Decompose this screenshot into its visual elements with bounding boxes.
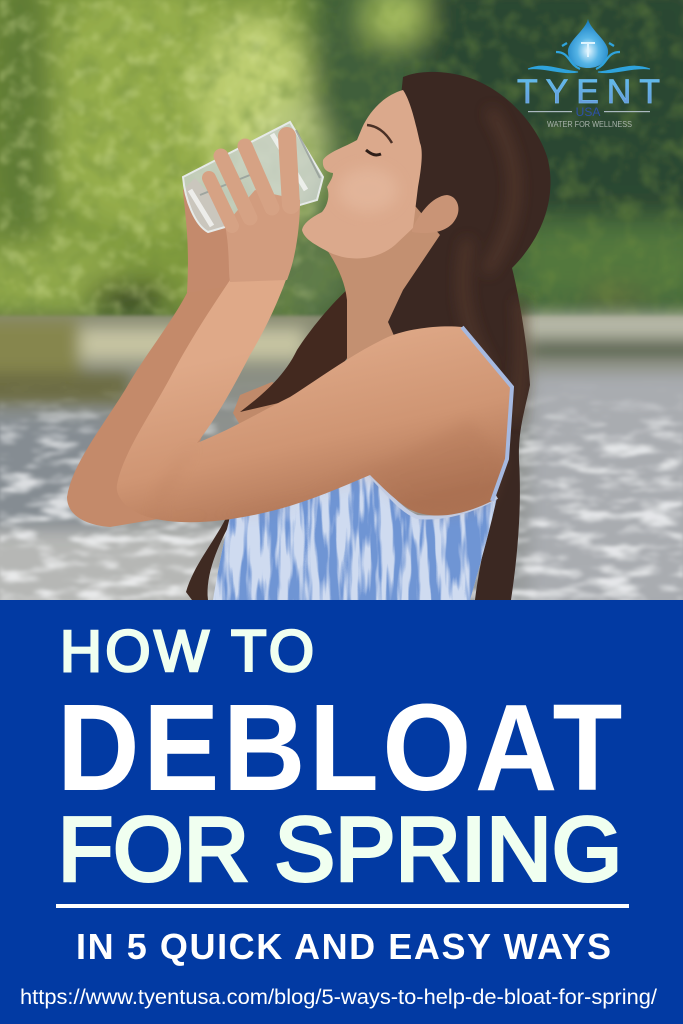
icon: water drop with waves [528, 19, 650, 73]
hair: left lock [240, 291, 347, 412]
subheading: IN 5 QUICK AND EASY WAYS [76, 926, 611, 967]
heading: FOR SPRING: FOR SPRING [58, 800, 622, 900]
hair: back mass [380, 72, 550, 600]
neck [328, 206, 440, 360]
logo: Tyent USA [517, 19, 660, 129]
hand holding glass [209, 136, 300, 282]
shoulder, upper arm and near forearm [117, 277, 512, 522]
hair: lower left strand [186, 518, 232, 600]
river [0, 314, 683, 620]
head and face [302, 90, 422, 258]
logo tagline: WATER FOR WELLNESS [547, 120, 632, 129]
dress with blue tie-dye pattern [213, 475, 496, 600]
logo rule left [528, 111, 572, 112]
far hand [183, 181, 230, 293]
title panel [0, 600, 683, 1024]
logo rule right [604, 111, 650, 112]
heading: DEBLOAT: DEBLOAT [57, 679, 622, 817]
neckline trim [370, 475, 497, 518]
arm shading [343, 475, 496, 519]
far arm [67, 286, 226, 527]
chest behind arm [233, 382, 278, 424]
background scenery [0, 0, 683, 620]
hair: lighter streaks [463, 110, 522, 420]
ear [421, 195, 458, 232]
logo wordmark: TYENT [517, 73, 660, 111]
photo: woman drinking water by a river [0, 0, 683, 620]
logo USA mark: USA [576, 105, 600, 119]
strap [462, 327, 512, 501]
divider rule [56, 904, 629, 908]
source URL: https://www.tyentusa.com/blog/5-ways-to-help-de-bloat-for-spring/ [20, 986, 657, 1009]
glass of water [183, 122, 323, 232]
forest background [0, 0, 683, 330]
heading: HOW TO: HOW TO [60, 619, 314, 684]
